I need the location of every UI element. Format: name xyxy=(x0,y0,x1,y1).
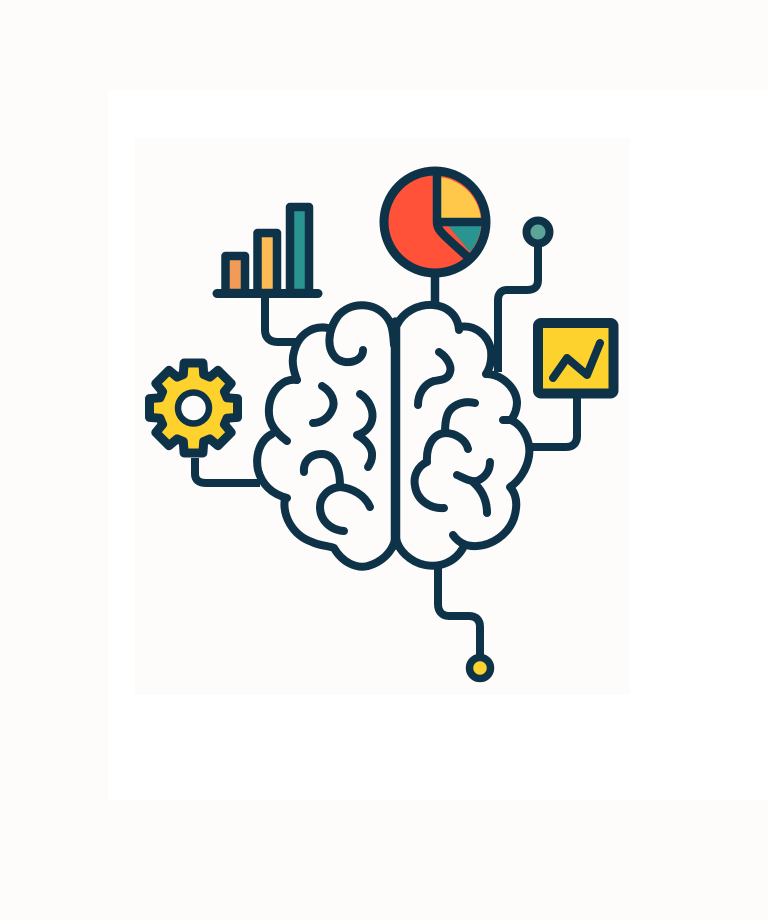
connector: bars to brain xyxy=(265,295,297,342)
connector: gear to brain xyxy=(195,458,260,483)
connector: pie to brain xyxy=(431,275,439,305)
connector: brain to bottom node xyxy=(438,565,480,655)
icon: yellow node xyxy=(470,658,490,678)
icon: bar chart xyxy=(217,207,318,294)
icon: teal node xyxy=(526,220,550,244)
icon: pie chart xyxy=(384,171,486,273)
icon: line chart card xyxy=(538,323,614,394)
icon: brain xyxy=(257,305,529,567)
icon: gear xyxy=(150,363,238,453)
connector: node to brain xyxy=(498,246,538,372)
connector: card to brain xyxy=(530,398,577,447)
